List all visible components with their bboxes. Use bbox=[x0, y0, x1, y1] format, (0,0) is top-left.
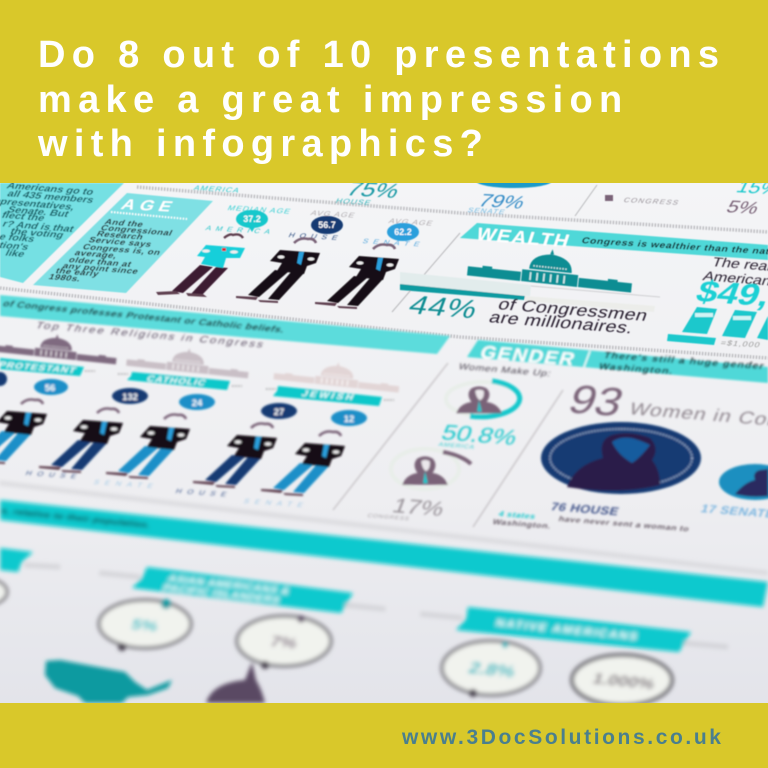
wealth stat bbox=[405, 291, 651, 337]
stat circle left edge bbox=[0, 578, 7, 606]
ribbon: left bbox=[0, 548, 33, 572]
bubbles: religion counts: 27 bbox=[274, 407, 284, 418]
lower infographic photo region bbox=[0, 483, 768, 705]
donut: Congress: 17% bbox=[389, 494, 448, 520]
wealth stat: 44% bbox=[405, 291, 482, 324]
women in congress heading: 93 bbox=[563, 377, 629, 425]
wealth right callout bbox=[667, 256, 768, 349]
dashed divider lines bbox=[0, 187, 768, 358]
title: make a great impression bbox=[38, 79, 629, 121]
ribbon: asian americans bbox=[132, 567, 353, 613]
donut: Congress: CONGRESS bbox=[366, 514, 410, 522]
religion subtitle: Top Three Religions in Congress bbox=[34, 320, 267, 350]
panel: age: Research bbox=[95, 229, 145, 241]
women in congress heading bbox=[563, 377, 768, 435]
bubbles: religion counts bbox=[0, 372, 367, 426]
middle infographic photo region bbox=[0, 295, 768, 533]
stat circle: 5%: 5% bbox=[129, 616, 161, 635]
donut: America bbox=[437, 381, 520, 451]
top cropped labels: HOUSE bbox=[334, 197, 373, 207]
women make up label: Women Make Up: bbox=[457, 362, 553, 379]
panel: gender heading bbox=[467, 340, 768, 383]
age figure: Senate: SENATE bbox=[361, 237, 426, 248]
panel: age bbox=[33, 193, 213, 293]
labels: house and senate bbox=[24, 469, 310, 509]
icon: capitol teal bbox=[467, 241, 635, 293]
stat circle: 1.000%: 1.000% bbox=[590, 670, 657, 692]
stat circle: 1.000% bbox=[572, 655, 672, 705]
upper infographic photo region bbox=[0, 174, 768, 358]
wealth bar bbox=[400, 272, 660, 312]
age figure: Senate: 62.2 bbox=[394, 227, 412, 237]
photo background bbox=[0, 183, 768, 703]
capitol: catholic bbox=[126, 342, 250, 378]
age figure: House: AVG AGE bbox=[309, 209, 357, 219]
panel: intro text: flect the bbox=[0, 211, 47, 224]
ribbon: jewish: JEWISH bbox=[300, 389, 358, 403]
donut: Congress bbox=[366, 449, 471, 522]
religion banner bbox=[0, 295, 450, 354]
women counts: 76 HOUSE bbox=[549, 500, 621, 518]
wealth stat: are millionaires. bbox=[487, 308, 636, 337]
panel: gender heading: There's still a huge gender bbox=[602, 351, 766, 372]
panel: intro text: the voting bbox=[8, 227, 65, 241]
gender footnote bbox=[491, 509, 691, 533]
age figure: House: 56.7 bbox=[318, 220, 336, 230]
panel: age: And the bbox=[103, 217, 145, 229]
panel: gender heading: GENDER bbox=[477, 342, 579, 370]
panel: age: average, bbox=[73, 248, 119, 260]
ribbon dashes bbox=[85, 371, 394, 400]
portrait: house women bbox=[541, 422, 701, 494]
portrait: senate women bbox=[719, 464, 768, 500]
panel: intro text bbox=[0, 181, 124, 283]
panel: gender heading: Washington. bbox=[597, 362, 675, 377]
panel: intro text: all 435 members bbox=[5, 189, 96, 206]
bubbles: religion counts: 24 bbox=[192, 398, 203, 409]
panel: age: 1980s. bbox=[47, 272, 83, 283]
ribbon: native americans bbox=[456, 607, 691, 652]
dashed divider bbox=[0, 483, 768, 573]
gender footnote: Washington. bbox=[491, 517, 553, 530]
bottom band bbox=[0, 703, 768, 768]
stat circle: 5% bbox=[99, 599, 191, 651]
panel: age: Congress is, on bbox=[81, 242, 163, 257]
panel: age: older than at bbox=[67, 255, 133, 269]
capitol: protestant bbox=[0, 328, 118, 364]
age figure: Senate bbox=[315, 217, 435, 309]
top cropped labels: AMERICA bbox=[192, 184, 242, 194]
ribbon: jewish bbox=[273, 386, 382, 406]
ribbon dashes bbox=[25, 565, 728, 647]
labels: house and senate: HOUSE bbox=[174, 487, 234, 499]
age figure: House bbox=[236, 209, 357, 303]
top cropped labels: 75% bbox=[342, 178, 403, 203]
top cropped labels: SENATE bbox=[466, 206, 507, 216]
teal band: s, relative to their population. bbox=[0, 506, 152, 530]
age figure: America bbox=[156, 204, 293, 297]
wealth right callout: =$1,000 bbox=[719, 338, 762, 349]
icon: usa map bbox=[45, 660, 172, 703]
stat circle: 4.8%: 2.8% bbox=[466, 658, 519, 681]
figures: religion bbox=[0, 400, 345, 496]
age figure: America: MEDIAN AGE bbox=[226, 204, 293, 215]
donut: America: AMERICA bbox=[437, 442, 476, 451]
panel: age: Service says bbox=[87, 235, 154, 249]
labels: house and senate: SENATE bbox=[242, 497, 310, 509]
panel: age: the early bbox=[54, 266, 101, 278]
religion banner: of Congress professes Protestant or Catholic beliefs. bbox=[1, 299, 286, 335]
ribbon: native americans: NATIVE AMERICANS bbox=[494, 618, 640, 643]
ribbon: asian americans: ASIAN AMERICANS & bbox=[166, 574, 292, 597]
panel: wealth heading bbox=[460, 223, 768, 260]
panel: age: AGE bbox=[118, 196, 180, 215]
top title band bbox=[0, 0, 768, 183]
panel: age: Congressional bbox=[99, 223, 174, 237]
top cropped labels bbox=[192, 174, 768, 218]
stat circle: 4.8% bbox=[442, 641, 540, 697]
age figure: America: AMERICA bbox=[204, 224, 277, 236]
capitol: jewish bbox=[273, 356, 401, 393]
gender footnote: 4 states bbox=[497, 509, 537, 521]
wealth stat: of Congressmen bbox=[496, 295, 651, 324]
women counts bbox=[549, 500, 768, 521]
top cropped labels: CONGRESS bbox=[622, 196, 681, 206]
panel: age: any point since bbox=[61, 261, 140, 276]
bubbles: religion counts: 56 bbox=[45, 383, 55, 394]
icon: person head bbox=[206, 662, 265, 703]
top cropped labels: 79% bbox=[475, 191, 529, 213]
labels: house and senate: HOUSE bbox=[24, 469, 84, 481]
website url: www.3DocSolutions.co.uk bbox=[401, 726, 724, 749]
stat circle: 7% bbox=[237, 616, 331, 669]
age figure: Senate: AVG AGE bbox=[387, 217, 435, 227]
panel: intro text: like bbox=[3, 249, 27, 260]
panel: intro text: r? And is that bbox=[0, 220, 76, 235]
gender footnote: have never sent a woman to bbox=[557, 514, 691, 533]
panel: wealth heading: WEALTH bbox=[473, 224, 573, 252]
teal band bbox=[0, 500, 768, 607]
age figure: House: HOUSE bbox=[287, 231, 344, 242]
labels: house and senate: SENATE bbox=[92, 478, 160, 490]
dividers bbox=[333, 363, 563, 527]
ribbon: asian americans: PACIFIC ISLANDERS bbox=[161, 583, 282, 605]
dividers bbox=[392, 185, 597, 312]
ribbon: catholic bbox=[127, 372, 230, 390]
donut: America: 50.8% bbox=[438, 421, 520, 450]
title: Do 8 out of 10 presentations bbox=[38, 34, 725, 76]
age figure: America: 37.2 bbox=[243, 214, 261, 224]
ribbon: catholic: CATHOLIC bbox=[145, 374, 208, 388]
top cropped labels: 5% bbox=[723, 198, 763, 218]
stat circle: 7%: 7% bbox=[268, 633, 300, 652]
panel: intro text: Senate. But bbox=[5, 205, 71, 220]
title: with infographics? bbox=[37, 123, 489, 165]
bubbles: religion counts: 132 bbox=[122, 392, 138, 403]
bubbles: religion counts: 12 bbox=[344, 414, 354, 425]
panel: intro text: Americans go to bbox=[5, 181, 95, 198]
